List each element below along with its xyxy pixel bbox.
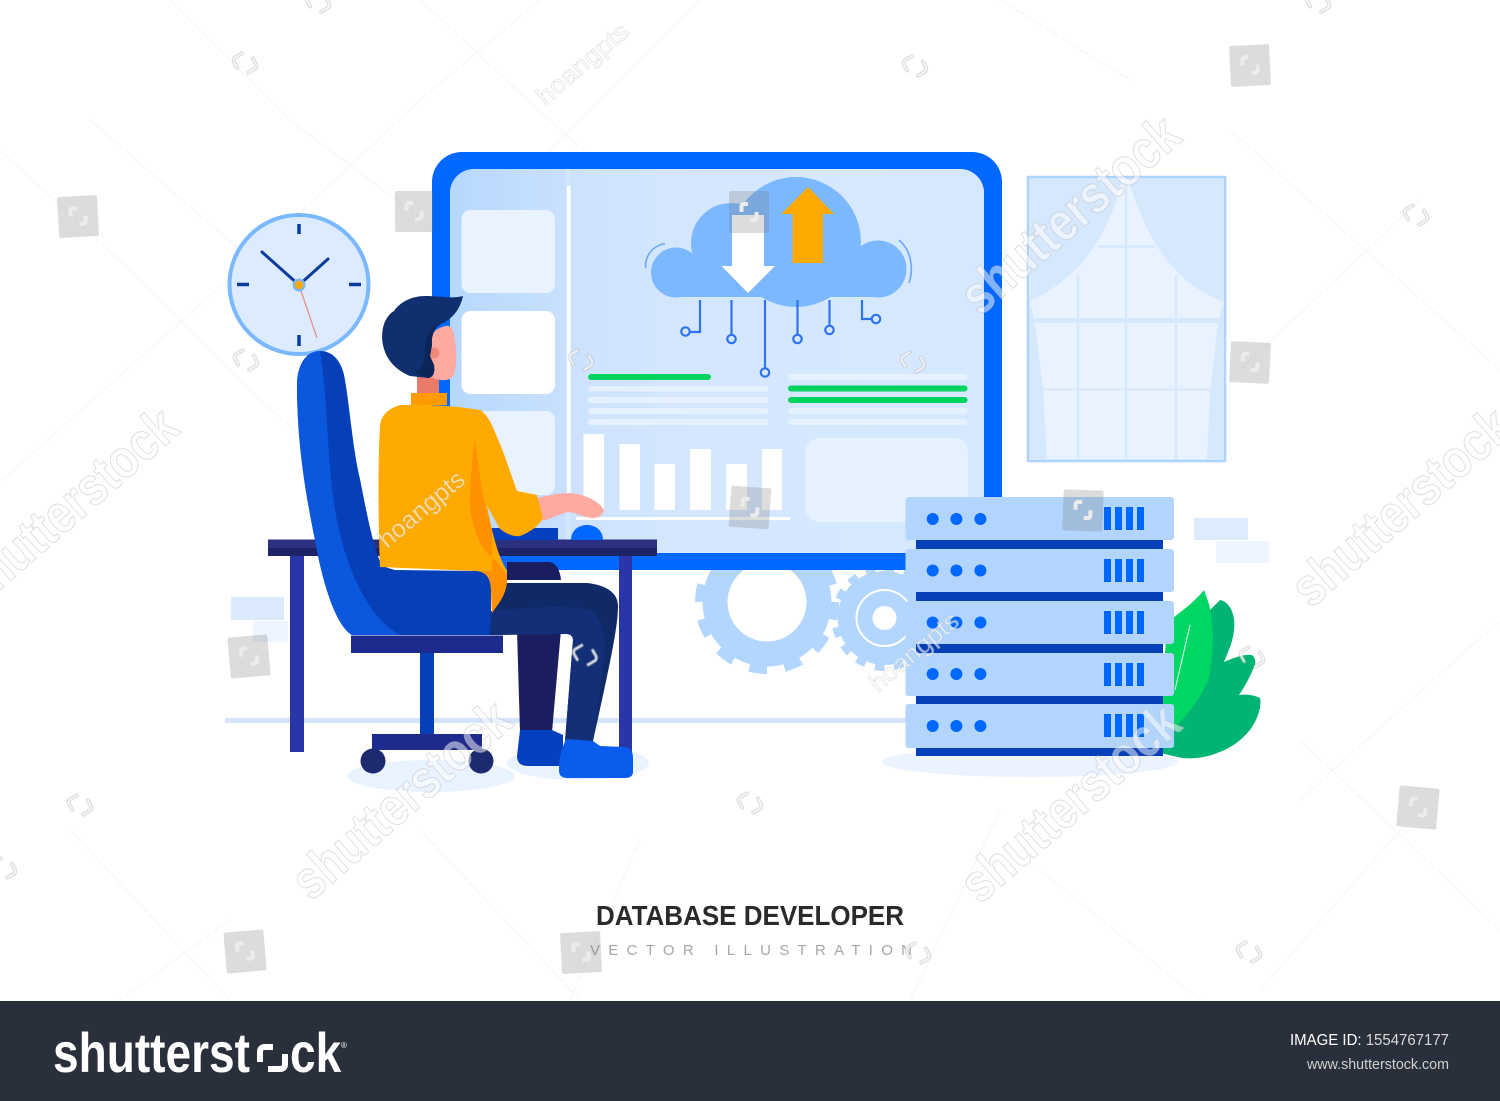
chair highlight bbox=[297, 351, 400, 635]
decorative background squares: left bbox=[231, 597, 288, 642]
curtain: lower left bbox=[1030, 300, 1047, 459]
watermark text: shutterstock bbox=[0, 103, 1500, 914]
collar bbox=[411, 393, 447, 405]
icon: wall clock bbox=[230, 215, 368, 354]
yellow shirt bbox=[378, 405, 543, 613]
dark green leaf bbox=[1160, 600, 1260, 758]
footer bar bbox=[0, 1001, 1500, 1101]
light green leaf bbox=[1160, 590, 1213, 727]
footer image id: IMAGE ID: 1554767177 bbox=[1290, 1032, 1449, 1049]
icon: large gear bbox=[700, 534, 834, 670]
hair bbox=[382, 296, 463, 378]
watermark text: hoangpts: hoangpts bbox=[531, 17, 635, 111]
wheel right bbox=[468, 748, 494, 774]
server rack bbox=[906, 497, 1174, 756]
chair post bbox=[420, 653, 434, 735]
ear bbox=[428, 348, 440, 358]
title: DATABASE DEVELOPER bbox=[596, 900, 904, 931]
front shoe bbox=[559, 739, 633, 778]
curtain: lower right bbox=[1207, 300, 1224, 459]
watermark text: shutterstock: shutterstock bbox=[949, 691, 1192, 914]
face bbox=[426, 326, 456, 380]
decorative background squares: right bbox=[1194, 518, 1269, 563]
sidebar card 2 bbox=[462, 311, 555, 394]
monitor bbox=[432, 152, 1002, 570]
front leg and trousers bbox=[490, 562, 618, 741]
server unit 5 bbox=[906, 704, 1174, 756]
curtain: top right bbox=[1128, 178, 1224, 302]
text lines right bbox=[788, 374, 968, 425]
watermark text: hoangpts: hoangpts bbox=[864, 607, 965, 698]
cloud bbox=[651, 177, 906, 307]
feet shadow bbox=[507, 746, 649, 780]
white download arrow bbox=[722, 215, 775, 293]
footer logo: shuttersto bbox=[53, 1022, 278, 1084]
hair shadow bbox=[414, 322, 445, 378]
orange upload arrow bbox=[782, 187, 834, 263]
person bbox=[378, 296, 604, 613]
chair wheel base bbox=[372, 734, 482, 750]
plant leaves bbox=[1160, 590, 1260, 758]
server unit 1 bbox=[906, 497, 1174, 549]
sidebar panel bbox=[450, 169, 566, 553]
sidebar card 1 bbox=[462, 210, 555, 293]
desk bbox=[268, 540, 657, 752]
watermark text: hoangpts: hoangpts bbox=[373, 465, 471, 554]
watermark text: shutterstock: shutterstock bbox=[949, 103, 1192, 326]
chair seat plate bbox=[351, 636, 503, 653]
text lines left bbox=[588, 374, 768, 425]
screen content gradient bbox=[570, 169, 984, 553]
keyboard bbox=[490, 528, 558, 540]
watermark squares bbox=[57, 44, 1440, 974]
subtitle: VECTOR ILLUSTRATION bbox=[590, 942, 912, 959]
bar chart bbox=[576, 434, 790, 520]
leaf vein bbox=[1175, 625, 1190, 690]
icon: small gear bbox=[836, 569, 934, 667]
arm hand bbox=[538, 493, 604, 521]
wheel left bbox=[360, 748, 386, 774]
panel card bbox=[806, 438, 968, 522]
server unit 4 bbox=[906, 653, 1174, 704]
server shadow bbox=[882, 747, 1178, 777]
shirt fold bbox=[470, 437, 507, 613]
footer website: www.shutterstock.com bbox=[1306, 1056, 1449, 1073]
neck bbox=[417, 372, 439, 396]
window with curtains bbox=[1028, 177, 1225, 461]
footer logo: ® bbox=[341, 1041, 347, 1050]
rear leg and shoe bbox=[517, 630, 563, 766]
curtain: top left bbox=[1030, 178, 1122, 301]
circuit connectors bbox=[681, 300, 880, 377]
server unit 2 bbox=[906, 549, 1174, 601]
server unit 3 bbox=[906, 601, 1174, 653]
office chair bbox=[297, 351, 503, 774]
cloud signal arcs bbox=[645, 240, 911, 283]
chair shadow bbox=[347, 760, 515, 792]
mouse bbox=[571, 525, 603, 540]
floor line bbox=[225, 718, 925, 723]
watermark text: hoangpts bbox=[373, 17, 965, 698]
footer logo: ck bbox=[290, 1022, 342, 1084]
watermark text: shutterstock: shutterstock bbox=[280, 688, 523, 911]
sidebar divider bbox=[567, 186, 570, 506]
sidebar card 3 bbox=[462, 411, 555, 495]
chair back and seat bbox=[297, 351, 491, 635]
